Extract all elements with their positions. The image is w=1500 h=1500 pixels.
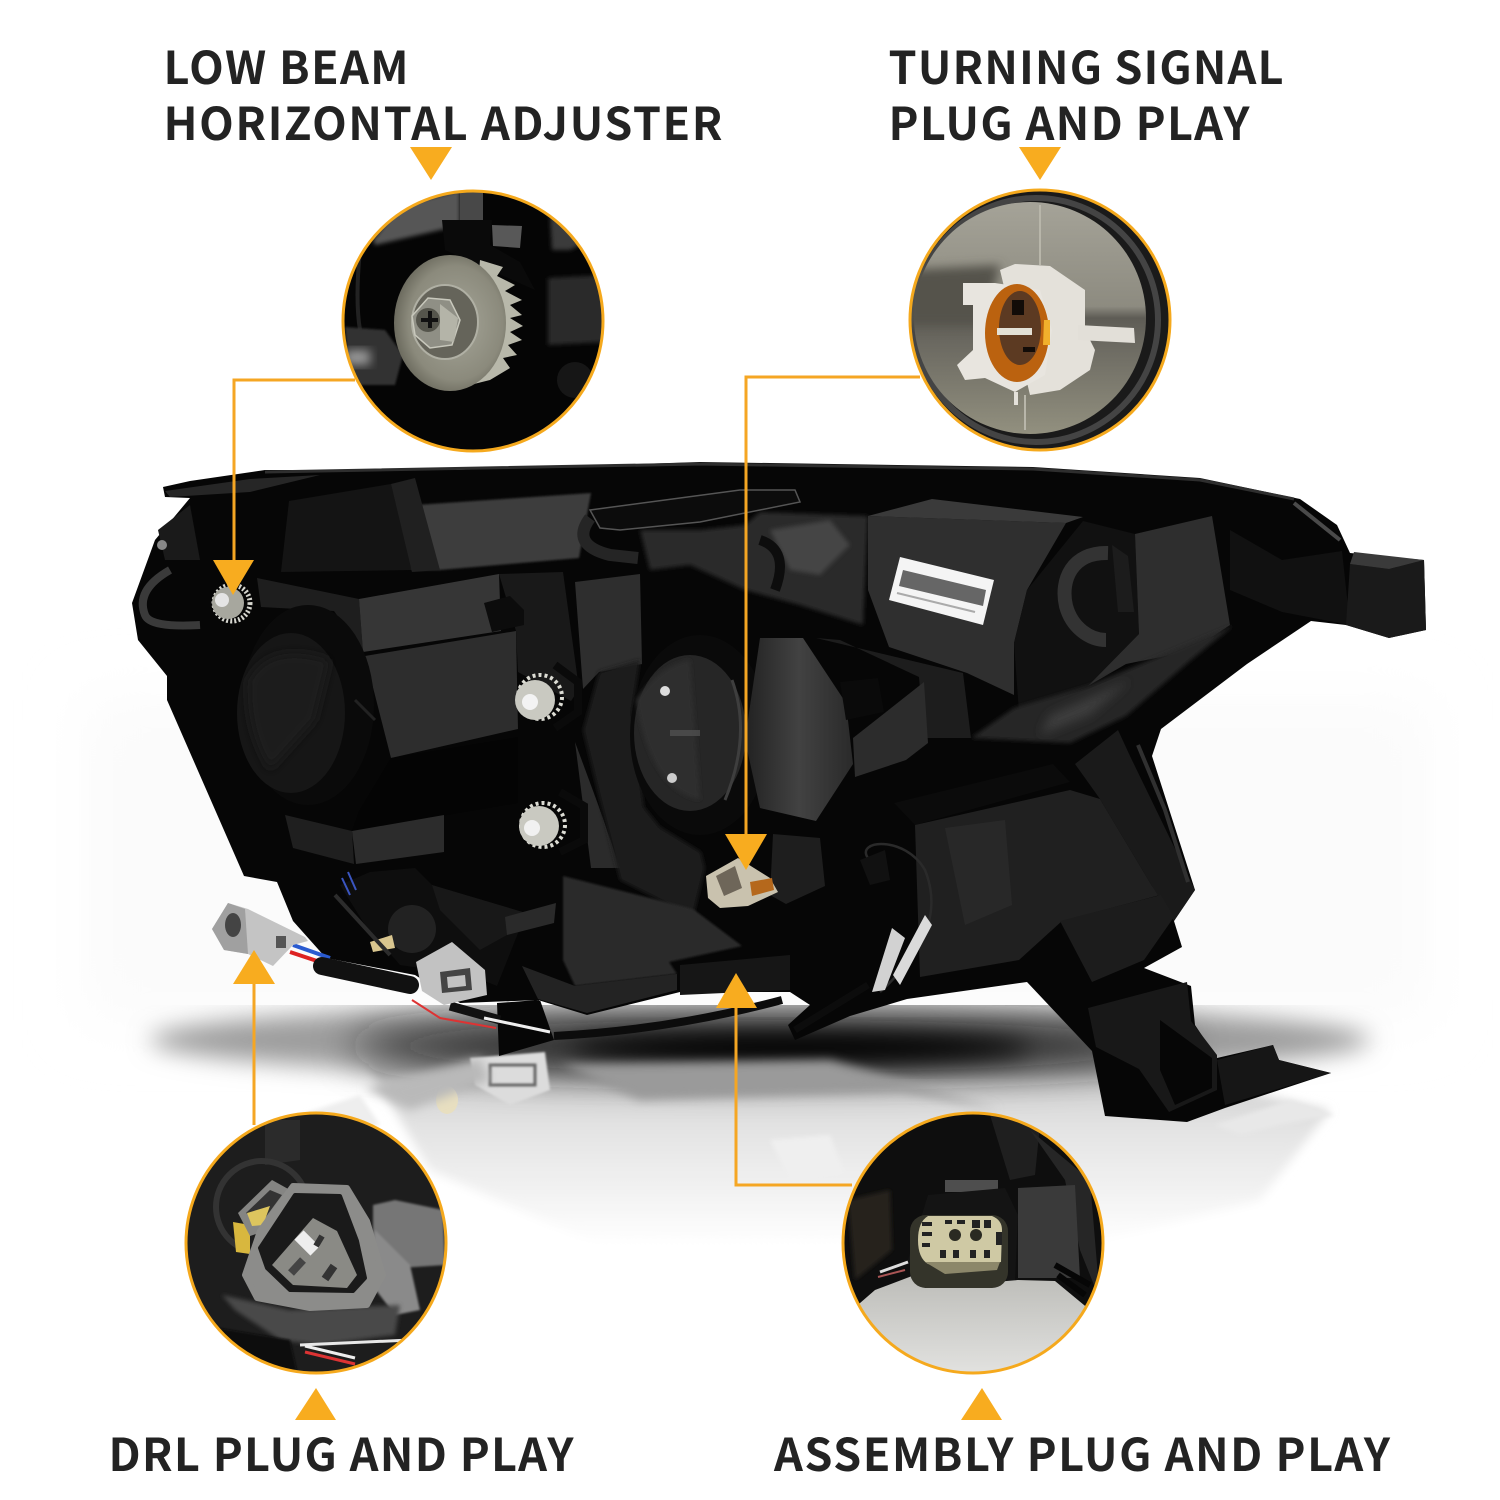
housing bottom band <box>352 815 444 864</box>
left cable loop <box>143 505 200 626</box>
callout line: assembly plug <box>716 973 852 1185</box>
wiring block <box>335 868 556 986</box>
right mid faces <box>816 638 971 738</box>
housing middle face <box>365 631 518 758</box>
bracket upper face <box>1060 895 1174 982</box>
lower body panel <box>563 876 742 986</box>
low beam dust cap <box>237 605 375 805</box>
wiring harness <box>290 844 932 1036</box>
heading: turning signal plug and play <box>888 32 1284 153</box>
heading: assembly plug and play: ASSEMBLY PLUG AND PLAY <box>773 1419 1391 1484</box>
lower housing band <box>894 764 1070 825</box>
right column <box>1075 730 1195 921</box>
grommet bay <box>1014 521 1139 712</box>
right mounting tab top <box>1350 552 1424 569</box>
pointer: low beam heading <box>410 147 452 180</box>
heading: DRL plug and play: DRL PLUG AND PLAY <box>108 1419 574 1484</box>
high beam assembly <box>630 635 853 835</box>
lamp silhouette <box>132 462 1426 1122</box>
mounting arm <box>583 490 800 558</box>
turn signal socket <box>706 834 825 908</box>
inner right edge highlight <box>1138 745 1188 882</box>
heading: turning signal plug and play: PLUG AND PLAY <box>888 88 1250 153</box>
upper left dark pocket <box>281 484 412 572</box>
vertical strut <box>391 478 440 572</box>
pointer: turning signal heading <box>1019 147 1061 180</box>
front lower face <box>853 682 928 777</box>
housing lower black face <box>352 737 518 831</box>
housing upper face <box>359 574 501 652</box>
lower lip <box>522 966 677 1013</box>
bracket lower <box>1088 982 1217 1112</box>
barcode label <box>889 557 994 625</box>
lit ridge <box>971 625 1234 743</box>
right tab arm <box>1230 530 1350 625</box>
heading: turning signal plug and play: TURNING SIGNAL <box>888 32 1284 97</box>
floor shadow and reflection <box>142 1005 1378 1212</box>
bracket pocket <box>1160 1020 1212 1105</box>
pointer: DRL heading <box>295 1388 336 1420</box>
headlight assembly photo <box>132 462 1426 1122</box>
label face <box>868 516 1066 695</box>
drl connector on lamp <box>212 903 308 966</box>
background haze <box>85 700 1430 1020</box>
centre column lit upper <box>575 574 642 689</box>
circle detail: assembly plug <box>840 1110 1110 1385</box>
centre body between caps <box>583 660 705 917</box>
pointer: assembly heading <box>961 1388 1002 1420</box>
circle detail: turning signal plug <box>905 185 1175 455</box>
housing bottom left face <box>285 815 354 864</box>
upper grey housing <box>412 493 591 570</box>
right upper face <box>1088 516 1230 686</box>
callout line: low beam adjuster <box>213 380 355 595</box>
circle detail: DRL plug <box>182 1110 452 1385</box>
left projector housing top <box>257 578 363 652</box>
heading: low beam horizontal adjuster: HORIZONTAL ADJUSTER <box>164 88 722 153</box>
centre upper area <box>640 512 868 625</box>
bracket foot <box>1217 1045 1331 1105</box>
circle detail: low beam adjuster gear <box>340 188 610 458</box>
callout line: DRL plug <box>233 950 275 1125</box>
right mounting tab <box>1346 560 1426 638</box>
lower housing panel <box>915 790 1160 977</box>
centre column left <box>499 572 579 701</box>
top strip <box>868 499 1083 523</box>
loop cable grommet <box>1065 545 1134 640</box>
callout line: turning signal <box>725 377 920 870</box>
heading: low beam horizontal adjuster: LOW BEAM <box>164 32 408 97</box>
adjuster gears <box>212 585 884 852</box>
heading: low beam horizontal adjuster <box>164 32 722 153</box>
embossed text area <box>945 820 1012 925</box>
top rim highlight <box>165 464 1340 540</box>
assembly connector on lamp <box>416 942 487 1005</box>
centre column lit lower <box>575 742 620 868</box>
